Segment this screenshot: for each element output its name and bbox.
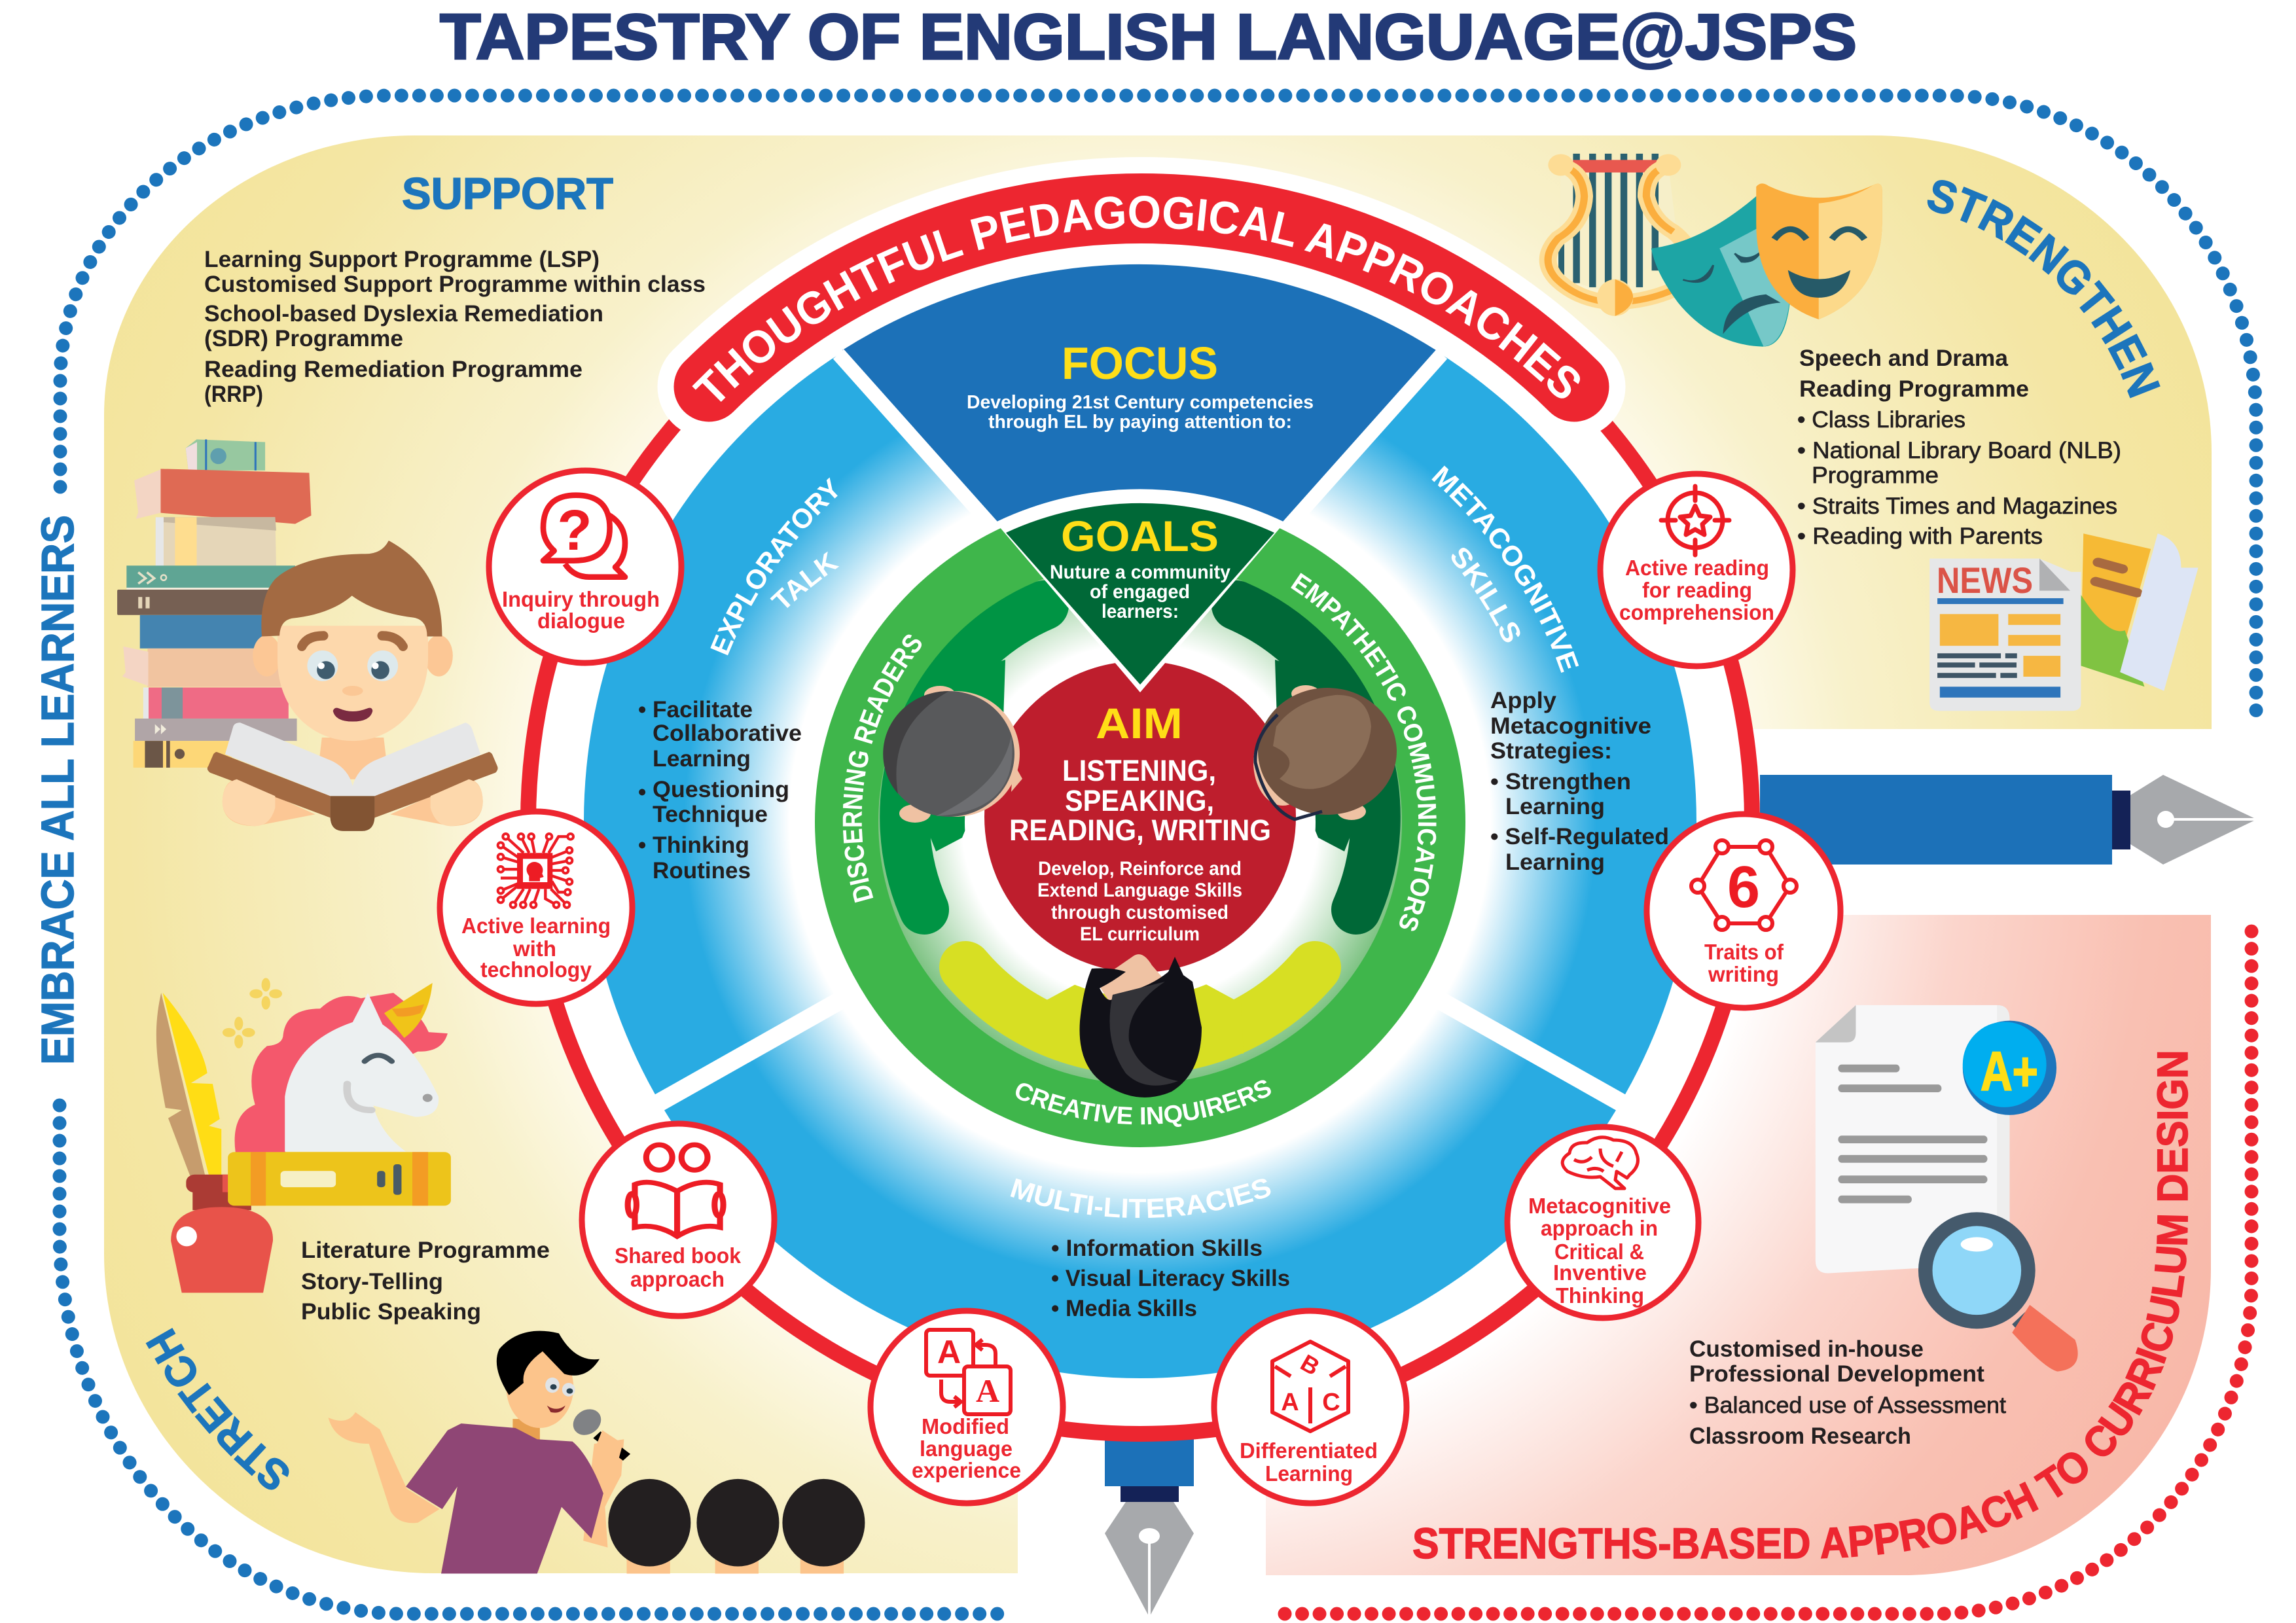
arm: right learner [1236, 605, 1376, 910]
title: TAPESTRY OF ENGLISH LANGUAGE@JSPS [440, 1, 1857, 73]
text block: metacognitive strategies: • Strengthen [1490, 769, 1631, 794]
illustration: unicorn on a book [223, 978, 451, 1205]
dotted border: strengths-based arc [1285, 919, 2251, 1614]
focus wedge [842, 264, 1436, 522]
badge: metacognitive approach: Thinking [1556, 1283, 1644, 1308]
badge: traits of writing [1647, 814, 1840, 1008]
badge: active reading: for reading [1642, 578, 1752, 602]
text block: curriculum design [1689, 1336, 2006, 1449]
A+ grade: A+ [1981, 1041, 2038, 1102]
text block: stretch programmes [301, 1238, 550, 1325]
text block: metacognitive strategies [1490, 688, 1669, 875]
text block: exploratory talk list: • [638, 697, 646, 722]
aim circle [984, 661, 1296, 972]
text block: metacognitive strategies: Apply [1490, 688, 1557, 713]
sector heading: talk: TALK [770, 551, 839, 608]
badge: modified language experience: experience [912, 1458, 1021, 1482]
dotted border: embrace all learners bottom arc [60, 1105, 1012, 1614]
heading: support: SUPPORT [402, 169, 613, 219]
heading: stretch: STRETCH [145, 1328, 289, 1489]
text block: aim description: EL curriculum [1080, 923, 1200, 945]
sector heading: skills: SKILLS [1452, 548, 1520, 643]
heading: goals: GOALS [1061, 512, 1219, 560]
arm: left learner [905, 605, 1044, 910]
pen: right [1760, 775, 2257, 865]
text block: exploratory talk list: Facilitate [653, 697, 753, 722]
icon: alphabet cube: C [1322, 1389, 1340, 1416]
arm: bottom learner [965, 967, 1315, 1054]
dotted border: embrace all learners top arc [60, 96, 2256, 720]
icon: brain [1562, 1137, 1638, 1188]
illustration: magnifying glass [1918, 1212, 2078, 1372]
badge: differentiated learning: Differentiated [1240, 1438, 1378, 1463]
text block: four language skills [1009, 754, 1271, 847]
illustration: boy reading a book [207, 541, 498, 831]
badge: shared book approach: approach [630, 1267, 725, 1291]
text block: support programmes: School-based Dyslexia Remediation [204, 301, 603, 327]
text block: support programmes: (RRP) [204, 382, 263, 407]
central wheel [528, 210, 1752, 1434]
goals wedge [996, 489, 1285, 692]
badge: metacognitive approach: Critical & [1554, 1240, 1644, 1264]
icon: alphabet cube: B [1296, 1349, 1324, 1381]
icon: six traits hexagon: 6 [1727, 855, 1760, 920]
text block: metacognitive strategies: Strategies: [1490, 738, 1612, 764]
panel: strengths-based background [1266, 915, 2211, 1575]
text block: exploratory talk list: • [638, 779, 646, 805]
green ring [815, 497, 1465, 1147]
badge: active learning with technology: with [512, 936, 556, 961]
icon: letter cards [926, 1330, 1011, 1414]
text block: metacognitive strategies: Metacognitive [1490, 713, 1651, 739]
pen: bottom [1105, 1433, 1194, 1617]
icon: question mark: ? [557, 499, 592, 562]
heading: aim: AIM [1096, 699, 1183, 747]
banner: thoughtful pedagogical approaches: THOUGHTFUL PEDAGOGICAL APPROACHES [692, 196, 1580, 402]
text block: support programmes: Customised Support Programme within class [204, 272, 706, 297]
text block: multi-literacies list: • Information Skills [1051, 1236, 1263, 1261]
sector heading: multi-literacies: MULTI-LITERACIES [1011, 1178, 1271, 1218]
illustration: storybook [2081, 533, 2198, 691]
badge: inquiry through dialogue [489, 471, 681, 663]
text block: exploratory talk list: Questioning [653, 777, 789, 802]
text block: stretch programmes: Literature Programme [301, 1238, 550, 1263]
text block: support programmes: Reading Remediation Programme [204, 357, 583, 382]
icon: alphabet cube: A [1281, 1389, 1299, 1416]
text block: strengthen programmes: • Class Libraries [1797, 407, 1965, 433]
text block: curriculum design: Professional Development [1689, 1361, 1984, 1387]
ring label: empathetic communicators: EMPATHETIC COMMUNICATORS [1291, 573, 1437, 931]
text block: exploratory talk list [638, 697, 802, 883]
badge: metacognitive approach: Inventive [1553, 1260, 1647, 1285]
illustration: lyre [1548, 154, 1692, 316]
icon: circuit chip with head [498, 834, 573, 908]
heading: strengthen: STRENGTHEN [1927, 180, 2161, 398]
badge: inquiry through dialogue: dialogue [537, 609, 625, 633]
text block: aim description: through customised [1051, 902, 1229, 923]
badge: metacognitive approach: Metacognitive [1528, 1194, 1671, 1218]
text block: focus: through EL by paying attention to: [988, 412, 1292, 433]
text block: strengthen programmes: Speech and Drama [1799, 346, 2009, 371]
badge: active reading [1600, 474, 1793, 666]
badge: modified language experience: Modified [922, 1414, 1009, 1438]
text block: support programmes [204, 247, 706, 407]
text block: metacognitive strategies: Learning [1505, 849, 1605, 875]
sector heading: metacognitive: METACOGNITIVE [1431, 466, 1579, 673]
heading: strengths-based approach: STRENGTHS-BASED APPROACH TO CURRICULUM DESIGN [1413, 1052, 2189, 1559]
text block: metacognitive strategies: • Self-Regulated [1490, 824, 1669, 849]
illustration: stack of books [117, 439, 312, 768]
text block: curriculum design: Classroom Research [1689, 1423, 1911, 1449]
icon: target with star [1661, 486, 1729, 555]
learner head: right [1253, 685, 1397, 820]
badge: traits of writing: Traits of [1704, 940, 1784, 964]
text block: stretch programmes: Story-Telling [301, 1269, 443, 1294]
text block: stretch programmes: Public Speaking [301, 1299, 481, 1325]
text block: multi-literacies list: • Media Skills [1051, 1296, 1197, 1321]
text block: curriculum design: Customised in-house [1689, 1336, 1924, 1362]
illustration: theatre masks [1651, 183, 1882, 347]
text block: aim description: Develop, Reinforce and [1038, 858, 1242, 880]
text block: goals: learners: [1102, 601, 1179, 622]
text block: four language skills: LISTENING, [1062, 754, 1216, 787]
badge: shared book approach [582, 1124, 774, 1316]
badge: inquiry through dialogue: Inquiry through [502, 587, 660, 611]
newspaper masthead: NEWS [1937, 560, 2033, 601]
icon: speech bubbles [543, 495, 625, 577]
text block: four language skills: SPEAKING, [1065, 784, 1214, 817]
illustration: newspaper [1929, 558, 2081, 711]
text block: goals: of engaged [1090, 581, 1190, 603]
icon: two people reading [628, 1145, 723, 1236]
badge: active learning with technology [440, 812, 632, 1004]
illustration: graded document [1816, 1005, 2056, 1274]
text block: strengthen programmes: • Straits Times and Magazines [1797, 493, 2117, 519]
text block: exploratory talk list: Routines [653, 858, 751, 883]
text block: multi-literacies list [1051, 1236, 1290, 1321]
badge: modified language experience: language [920, 1436, 1013, 1461]
text block: strengthen programmes: Programme [1812, 463, 1939, 488]
badge: differentiated learning [1214, 1311, 1407, 1503]
icon: letter cards: A [937, 1334, 961, 1370]
icon: letter cards: A [976, 1372, 999, 1409]
badge: active learning with technology: technology [480, 957, 592, 982]
text block: multi-literacies list: • Visual Literacy Skills [1051, 1266, 1290, 1291]
ring label: discerning readers: DISCERNING READERS [843, 635, 922, 903]
text block: exploratory talk list: Collaborative [653, 721, 802, 746]
text block: exploratory talk list: Learning [653, 746, 751, 772]
badge: active learning with technology: Active learning [461, 914, 611, 938]
text block: exploratory talk list: Thinking [653, 832, 749, 858]
text block: strengthen programmes: • National Library Board (NLB) [1797, 438, 2121, 463]
text block: strengthen programmes: • Reading with Parents [1797, 524, 2043, 549]
illustration: audience heads [608, 1479, 865, 1574]
badge: active reading: Active reading [1625, 556, 1769, 580]
text block: strengthen programmes [1797, 346, 2121, 549]
badge: differentiated learning: Learning [1265, 1461, 1353, 1486]
text block: focus: Developing 21st Century competencies [967, 392, 1314, 413]
badge: metacognitive approach: approach in [1541, 1216, 1658, 1240]
text block: aim description [1037, 858, 1242, 945]
icon: alphabet cube [1272, 1342, 1348, 1431]
text block: exploratory talk list: • [638, 832, 646, 858]
text block: aim description: Extend Language Skills [1037, 880, 1242, 901]
badge: active reading: comprehension [1619, 600, 1774, 624]
embrace all learners label: EMBRACE ALL LEARNERS [32, 515, 83, 1065]
learner head: left [883, 686, 1022, 823]
heading: focus: FOCUS [1062, 338, 1218, 389]
sector heading: exploratory: EXPLORATORY [710, 478, 838, 656]
illustration: singer with microphone [329, 1331, 626, 1574]
text block: strengthen programmes: Reading Programme [1799, 376, 2029, 402]
text block: goals: Nuture a community [1050, 562, 1230, 583]
text block: support programmes: (SDR) Programme [204, 326, 403, 351]
badge: traits of writing: writing [1708, 962, 1779, 986]
ring label: creative inquirers: CREATIVE INQUIRERS [1016, 1080, 1271, 1127]
blue pedagogy disc [584, 266, 1696, 1378]
badge: metacognitive approach [1507, 1127, 1698, 1318]
illustration: quill and ink bottle [156, 993, 273, 1293]
text block: four language skills: READING, WRITING [1009, 813, 1271, 847]
text block: metacognitive strategies: Learning [1505, 794, 1605, 819]
badge: shared book approach: Shared book [615, 1243, 742, 1268]
text block: exploratory talk list: Technique [653, 802, 768, 827]
text block: focus [967, 392, 1314, 433]
text block: support programmes: Learning Support Programme (LSP) [204, 247, 600, 272]
text block: goals [1050, 562, 1230, 622]
learner head: bottom [1080, 954, 1202, 1097]
text block: curriculum design: • Balanced use of Assessment [1689, 1393, 2006, 1418]
badge: modified language experience [870, 1311, 1063, 1503]
icon: six traits hexagon [1691, 840, 1797, 930]
